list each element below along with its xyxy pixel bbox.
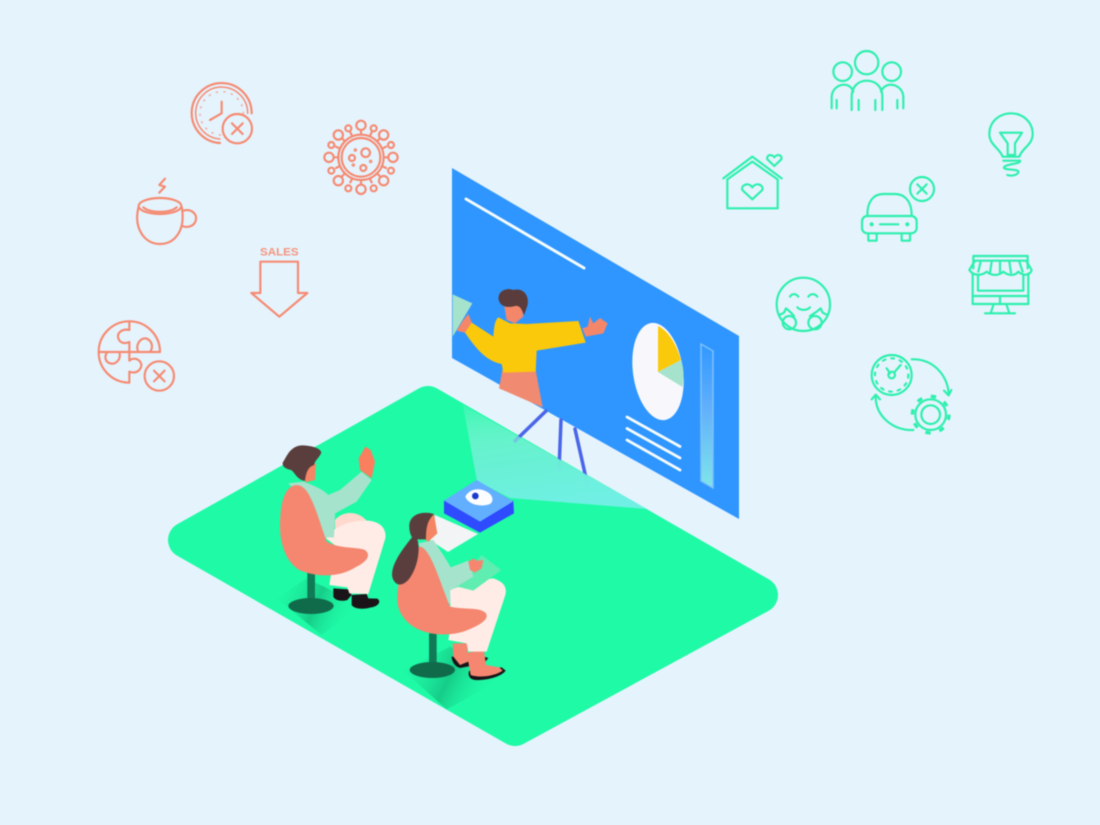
icon: clock with cross xyxy=(192,83,252,143)
projector lens xyxy=(465,489,492,505)
chair base xyxy=(288,598,334,614)
pie yellow slice xyxy=(658,326,681,372)
green floor xyxy=(186,404,760,728)
hand xyxy=(468,558,483,573)
icon: coffee cup xyxy=(137,179,196,244)
presenter left hand xyxy=(457,314,472,333)
presentation screen xyxy=(452,168,739,519)
projector xyxy=(444,480,514,533)
bare legs xyxy=(453,643,503,677)
icon: puzzle with cross xyxy=(99,321,174,391)
presenter skirt xyxy=(499,370,543,407)
far knee xyxy=(335,513,367,540)
screen text lines xyxy=(627,417,680,470)
icon: smiling face with hands xyxy=(777,278,830,331)
icon: virus xyxy=(324,121,398,194)
chair base xyxy=(410,662,455,678)
seated woman xyxy=(392,513,506,709)
salmon problem icons xyxy=(99,83,398,391)
icon: car with cross xyxy=(862,177,934,241)
icon: group of people xyxy=(832,51,903,110)
floor shadow xyxy=(403,647,505,709)
floor shadow xyxy=(277,578,362,635)
shirt xyxy=(288,472,372,537)
green benefit icons xyxy=(723,51,1033,433)
screen title line xyxy=(466,199,584,268)
presenter face xyxy=(504,303,523,323)
chair stem xyxy=(429,633,437,665)
front shoe xyxy=(469,667,506,680)
icon: sales down arrow xyxy=(251,247,307,317)
pie chart xyxy=(626,319,690,424)
icon: light bulb with funnel xyxy=(989,113,1033,176)
tablet xyxy=(455,555,501,591)
chair shell xyxy=(397,547,487,634)
white strip under projector xyxy=(430,515,478,552)
sales label: SALES xyxy=(260,247,299,259)
projector pupil xyxy=(472,493,479,499)
icon: house with hearts xyxy=(723,155,782,208)
shirt xyxy=(418,540,473,605)
pie mint slice xyxy=(658,360,683,387)
neck and face xyxy=(305,463,316,482)
hair xyxy=(283,445,321,481)
front shoe xyxy=(352,594,379,609)
presenter on screen xyxy=(453,289,608,407)
vertical progress bar xyxy=(701,344,713,488)
mint board xyxy=(453,294,472,337)
icon: clock and gear cycle xyxy=(872,355,951,433)
yellow sweater xyxy=(465,317,586,373)
icon: online store monitor xyxy=(969,256,1032,313)
projector side xyxy=(444,501,514,533)
back shoe xyxy=(452,657,488,668)
seated man xyxy=(277,445,386,635)
trousers xyxy=(326,521,386,594)
tripod legs xyxy=(515,411,588,487)
pie base xyxy=(626,319,690,424)
projector light beam xyxy=(463,405,647,509)
projector top xyxy=(444,480,513,522)
trousers xyxy=(448,578,506,652)
chair shell xyxy=(280,485,368,575)
back shoe xyxy=(333,588,352,601)
screen panel xyxy=(452,168,739,519)
arrow outline xyxy=(251,262,307,317)
face xyxy=(423,514,437,542)
presenter hair xyxy=(499,289,528,315)
hair and ponytail xyxy=(392,513,434,584)
presenter right hand xyxy=(582,317,608,337)
raised hand xyxy=(359,447,375,478)
chair stem xyxy=(307,572,315,605)
